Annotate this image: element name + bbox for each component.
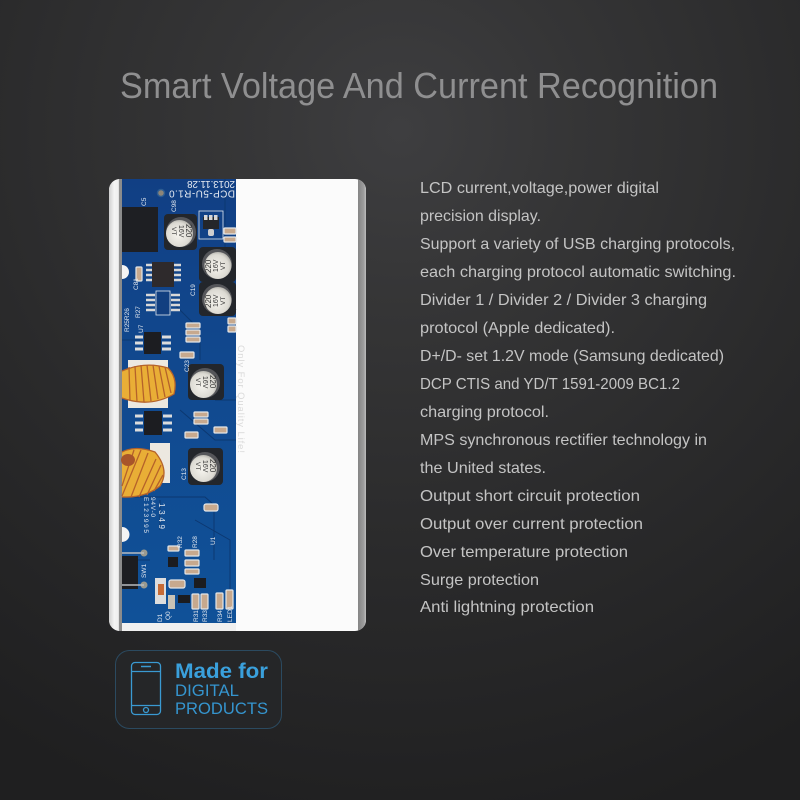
title: Smart Voltage And Current Recognition <box>120 65 718 106</box>
silkscreen labels: U1 <box>210 536 217 545</box>
chip U6 outlined <box>146 291 180 315</box>
silkscreen labels: R25R26 <box>124 308 131 332</box>
capacitor 3 <box>199 282 236 316</box>
text block: feature list: protocol (Apple dedicated). <box>420 320 615 337</box>
text block: feature list: charging protocol. <box>420 404 549 421</box>
silkscreen labels: C19 <box>190 284 197 296</box>
capacitor 4: 16V <box>201 376 208 389</box>
regulator U10 <box>199 211 223 239</box>
capacitor 1: 220 <box>184 224 193 238</box>
text block: feature list: Surge protection <box>420 572 539 589</box>
silkscreen labels: LED1 <box>227 605 234 622</box>
chip U5 <box>135 411 172 435</box>
device white body <box>109 179 366 631</box>
circuit board <box>121 178 236 623</box>
capacitor 5: 16V <box>201 460 208 473</box>
silkscreen labels: C98 <box>171 200 178 212</box>
capacitor 1 <box>164 214 197 250</box>
panel: device with exposed circuit board <box>109 178 366 631</box>
silkscreen labels: R31 <box>193 610 200 622</box>
capacitor 3: 16V <box>213 294 220 307</box>
text block: feature list: each charging protocol automatic switching. <box>420 264 736 281</box>
text block: feature list <box>420 180 736 616</box>
chip U7 <box>135 332 171 354</box>
left silver edge <box>109 179 122 631</box>
capacitor 3: VT <box>220 297 227 305</box>
silkscreen labels: R27 <box>135 306 142 318</box>
text block: feature list: Output short circuit protection <box>420 488 640 505</box>
capacitor 1: 16V <box>177 225 184 238</box>
silkscreen labels: R28 <box>192 536 199 548</box>
switch SW1 <box>122 550 148 589</box>
capacitor 4 <box>188 364 224 400</box>
silkscreen labels: U7 <box>138 324 145 333</box>
text block: feature list: Over temperature protection <box>420 544 628 561</box>
capacitor 2: 220 <box>204 259 213 273</box>
badge heading: Made for <box>175 660 268 683</box>
toroid inductor bottom <box>121 443 170 497</box>
capacitor 5: VT <box>194 462 201 470</box>
badge outline <box>116 650 282 728</box>
diode and transistors <box>155 557 206 609</box>
silkscreen labels: C5 <box>141 197 148 206</box>
black connector <box>122 207 158 252</box>
silkscreen labels: R32 <box>177 536 184 548</box>
capacitor 5: 220 <box>208 459 217 473</box>
capacitor 4: 220 <box>208 375 217 389</box>
capacitor 2: VT <box>220 262 227 270</box>
silkscreen labels: D1 <box>157 613 164 622</box>
badge subheading line two: PRODUCTS <box>175 700 268 718</box>
toroid inductor top <box>122 360 175 408</box>
silkscreen labels: SW1 <box>141 564 148 578</box>
capacitor 5 <box>188 448 223 485</box>
text block: feature list: LCD current,voltage,power digital <box>420 180 659 197</box>
engraved tagline: Only For Quality Life! <box>235 345 246 453</box>
silkscreen labels: 1349 <box>157 503 166 530</box>
badge: made for digital products <box>116 650 282 728</box>
text block: feature list: Output over current protection <box>420 516 643 533</box>
mounting pad <box>158 190 164 196</box>
board revision text: DCP-5U-R1.0 <box>169 188 235 198</box>
right silver edge <box>358 179 366 631</box>
text block: feature list: the United states. <box>420 460 546 477</box>
silkscreen labels: C13 <box>181 468 188 480</box>
capacitor 3: 220 <box>204 294 213 308</box>
silkscreen labels: C81 <box>133 278 140 290</box>
silkscreen labels: Q0 <box>165 611 172 620</box>
text block: feature list: Divider 1 / Divider 2 / Divider 3 charging <box>420 292 707 309</box>
silkscreen labels: R34 <box>217 610 224 622</box>
silkscreen labels: R33 <box>202 610 209 622</box>
silkscreen labels: E123995 <box>142 497 149 533</box>
chip U8 <box>146 262 181 287</box>
text block: feature list: Anti lightning protection <box>420 599 594 616</box>
mounting holes <box>122 265 130 542</box>
text block: feature list: MPS synchronous rectifier technology in <box>420 432 707 449</box>
text block: feature list: DCP CTIS and YD/T 1591-2009 BC1.2 <box>420 376 680 393</box>
silkscreen labels <box>124 197 234 622</box>
capacitor 1: VT <box>170 227 177 235</box>
capacitor 4: VT <box>194 378 201 386</box>
capacitor 2 <box>199 247 236 282</box>
text block: feature list: Support a variety of USB charging protocols, <box>420 236 735 253</box>
icon: smartphone <box>132 662 160 714</box>
text block: feature list: precision display. <box>420 208 541 225</box>
text block: feature list: D+/D- set 1.2V mode (Samsung dedicated) <box>420 348 724 365</box>
capacitor 2: 16V <box>213 259 220 272</box>
small passive components <box>136 228 236 609</box>
silkscreen labels: 94V-0 <box>149 497 156 517</box>
silkscreen labels: C23 <box>184 360 191 372</box>
board date text: 2013.11.28 <box>187 178 235 189</box>
badge subheading: DIGITAL <box>175 682 239 700</box>
bottom left edge <box>122 623 236 631</box>
